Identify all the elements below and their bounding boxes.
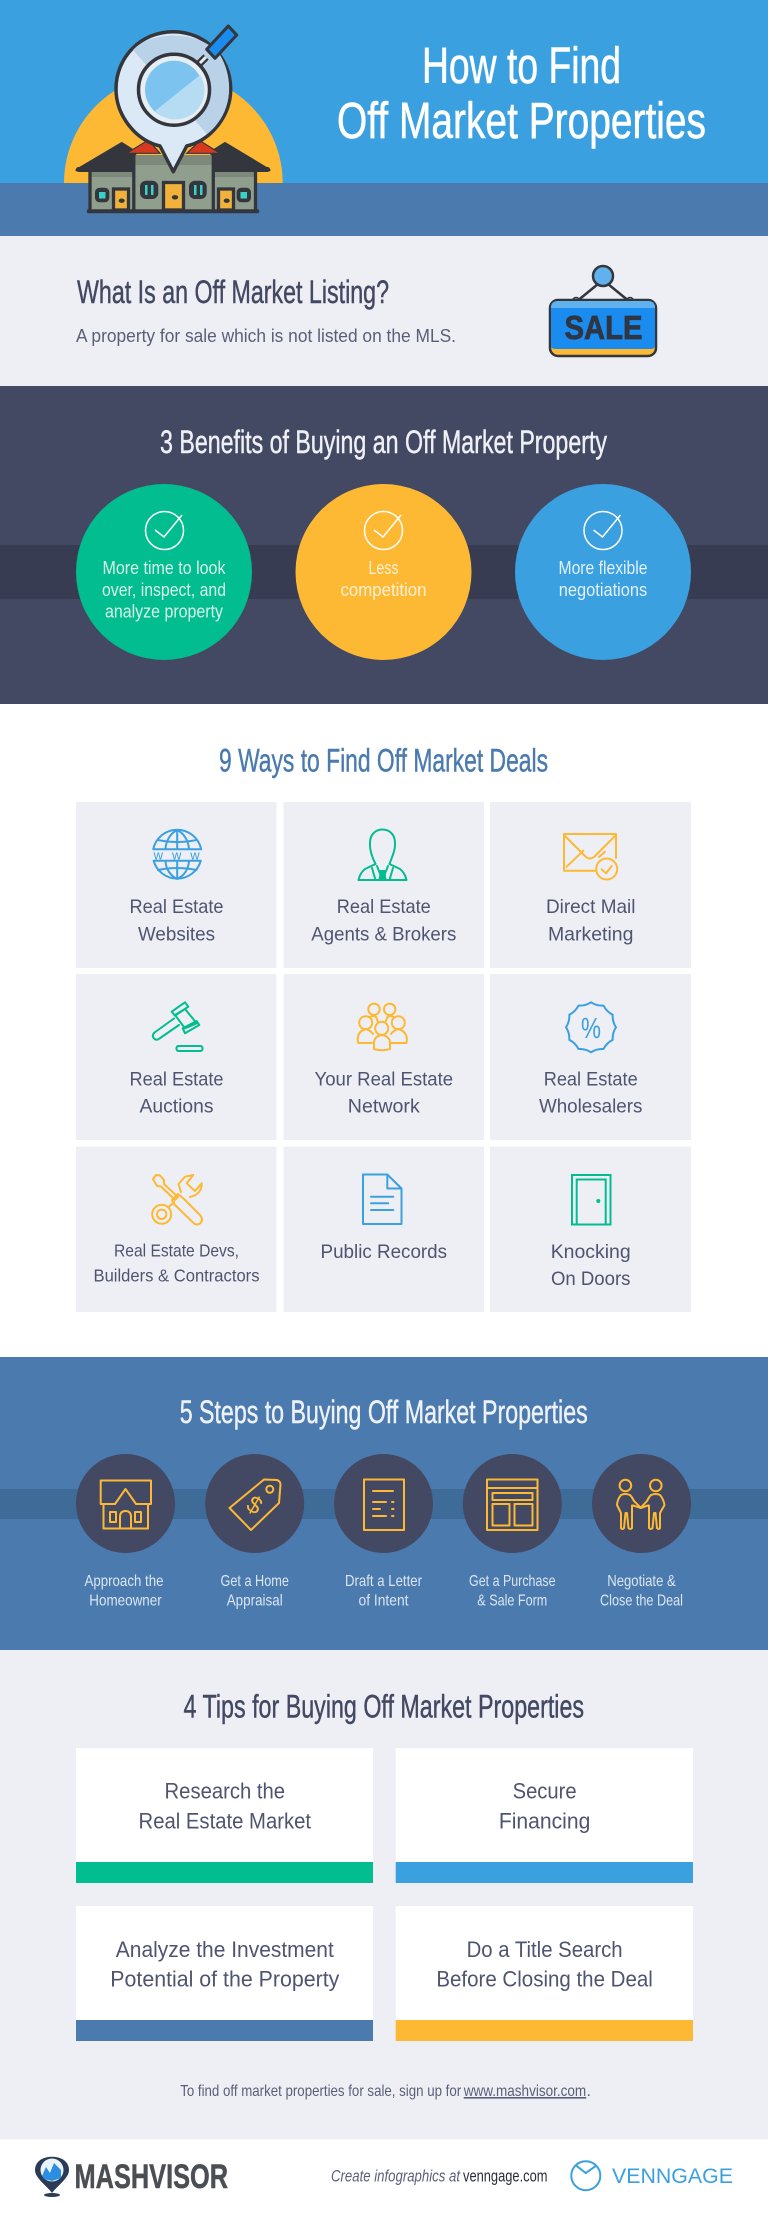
step: approach the homeowner	[76, 1454, 175, 1610]
icon: house with location pin and magnifier	[64, 26, 283, 213]
step: purchase and sale form	[463, 1454, 562, 1610]
heading: 5 steps: 5 Steps to Buying Off Market Properties	[180, 1394, 588, 1430]
benefit: more time: More time to look	[102, 558, 226, 578]
tip: title search: Before Closing the Deal	[436, 1967, 653, 1992]
text: sign up note: .	[586, 2083, 591, 2100]
step: negotiate and close	[592, 1454, 691, 1610]
card: devs builders contractors: Real Estate Devs,	[114, 1240, 239, 1260]
card: auctions: Real Estate	[130, 1068, 224, 1090]
tip: analyze: Potential of the Property	[110, 1967, 339, 1992]
panel: what is an off market listing	[0, 236, 768, 386]
card: agents and brokers: Agents & Brokers	[311, 924, 457, 946]
tip: analyze	[76, 1906, 373, 2041]
text: create infographics: venngage.com	[463, 2168, 548, 2186]
card: wholesalers: %	[581, 1013, 601, 1045]
card: devs builders contractors: Builders & Contractors	[94, 1266, 260, 1286]
benefit: more flexible	[515, 484, 691, 660]
panel: header	[0, 0, 768, 236]
card: public records	[284, 1146, 484, 1312]
benefit: more flexible: More flexible	[558, 558, 648, 578]
step: home appraisal: $	[242, 1490, 267, 1520]
card: wholesalers: Real Estate	[544, 1068, 638, 1090]
heading: what is: What Is an Off Market Listing?	[77, 274, 389, 310]
card: real estate websites: Websites	[138, 924, 215, 946]
heading: 3 benefits: 3 Benefits of Buying an Off Market Property	[160, 424, 607, 460]
step: letter of intent: of Intent	[358, 1593, 409, 1610]
heading: 4 tips: 4 Tips for Buying Off Market Properties	[184, 1688, 584, 1724]
card: real estate websites: Real Estate	[130, 896, 224, 918]
card: wholesalers: Wholesalers	[539, 1096, 643, 1118]
tip: research: Research the	[165, 1778, 285, 1804]
step: approach the homeowner: Homeowner	[89, 1593, 162, 1610]
card: network: Your Real Estate	[315, 1068, 453, 1090]
card: devs builders contractors	[76, 1146, 276, 1312]
text: definition: A property for sale which is not listed on the MLS.	[76, 325, 456, 346]
benefit: less competition	[296, 484, 472, 660]
panel: footer	[0, 2140, 768, 2215]
step: letter of intent: Draft a Letter	[345, 1573, 423, 1590]
panel: 3 benefits	[0, 386, 768, 704]
card: agents and brokers: Real Estate	[337, 896, 431, 918]
tip: title search	[396, 1906, 693, 2041]
heading: 9 ways: 9 Ways to Find Off Market Deals	[219, 742, 548, 778]
step: purchase and sale form: Get a Purchase	[469, 1573, 556, 1590]
card: real estate websites: www	[153, 848, 200, 862]
panel: 4 tips	[0, 1650, 768, 2140]
text: sign up note: www.mashvisor.com	[463, 2083, 586, 2100]
card: auctions	[76, 974, 276, 1140]
logo: mashvisor	[35, 2157, 228, 2197]
tip: financing	[396, 1748, 693, 1883]
logo: venngage: VENNGAGE	[612, 2164, 733, 2188]
tip: financing: Financing	[499, 1808, 590, 1833]
card: knocking on doors: On Doors	[551, 1268, 631, 1290]
tip: financing: Secure	[513, 1778, 577, 1804]
title: How to Find	[422, 37, 621, 94]
card: direct mail: Direct Mail	[546, 896, 635, 918]
tip: research	[76, 1748, 373, 1883]
card: real estate websites	[76, 802, 276, 968]
step: negotiate and close: Negotiate &	[607, 1573, 676, 1590]
step: approach the homeowner: Approach the	[84, 1573, 164, 1590]
card: network	[284, 974, 484, 1140]
text: sign up note: To find off market properties for sale, sign up for	[180, 2083, 462, 2100]
title	[337, 37, 706, 149]
panel: 9 ways	[0, 704, 768, 1357]
step: home appraisal	[205, 1454, 304, 1610]
text: create infographics: Create infographics at	[331, 2168, 461, 2186]
tip: analyze: Analyze the Investment	[116, 1937, 334, 1962]
tip: research: Real Estate Market	[139, 1808, 311, 1833]
card: wholesalers	[490, 974, 691, 1140]
benefit: more flexible: negotiations	[559, 580, 647, 600]
card: direct mail	[490, 802, 691, 968]
step: letter of intent	[334, 1454, 433, 1610]
benefit: more time	[76, 484, 252, 660]
step: purchase and sale form: & Sale Form	[477, 1593, 547, 1610]
card: agents and brokers	[284, 802, 484, 968]
benefit: more time: over, inspect, and	[102, 580, 226, 600]
step: negotiate and close: Close the Deal	[600, 1593, 683, 1610]
logo: venngage	[571, 2161, 733, 2190]
icon: sale sign	[550, 266, 656, 356]
step: home appraisal: Get a Home	[220, 1573, 289, 1590]
card: direct mail: Marketing	[548, 924, 633, 946]
card: network: Network	[348, 1096, 420, 1118]
benefit: more time: analyze property	[105, 602, 223, 622]
card: public records: Public Records	[321, 1241, 447, 1263]
benefit: less competition: competition	[340, 580, 426, 600]
step: home appraisal: Appraisal	[227, 1593, 283, 1610]
logo: mashvisor: MASHVISOR	[75, 2158, 228, 2196]
tip: title search: Do a Title Search	[467, 1937, 623, 1962]
panel: 5 steps	[0, 1357, 768, 1650]
card: auctions: Auctions	[140, 1096, 214, 1118]
card: knocking on doors	[490, 1146, 691, 1312]
card: knocking on doors: Knocking	[551, 1241, 631, 1263]
icon: sale sign: SALE	[564, 309, 642, 346]
benefit: less competition: Less	[368, 558, 398, 578]
